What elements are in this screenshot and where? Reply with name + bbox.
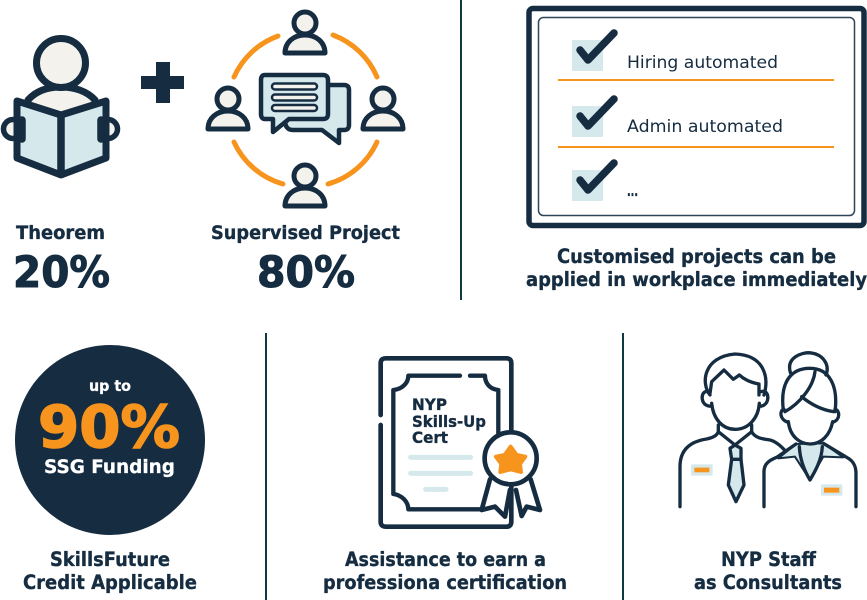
icon: group discussion [208,12,403,206]
woman [764,353,856,507]
checklist item: admin: Admin automated [627,117,783,137]
icon: plus [141,62,184,103]
panel: funding [15,345,205,594]
icon: certificate: Skills-Up [412,412,486,431]
icon: certificate: Cert [412,428,448,447]
panel: consultants [680,353,856,594]
panel: supervised project [208,12,403,298]
caption: certification [323,548,567,594]
checklist item: more: ... [627,184,638,200]
checklist item: admin [572,99,783,137]
panel: certification [323,358,567,594]
value: 80%: 80% [257,248,355,298]
icon: person reading book [4,38,118,175]
checklist item: hiring [572,33,778,73]
caption: customised projects [526,245,867,291]
caption: skillsfuture: SkillsFuture [50,548,170,571]
caption: skillsfuture [23,548,197,594]
caption: consultants [694,548,842,594]
checklist board [529,8,864,226]
label: theorem: Theorem [16,222,105,244]
value: 20%: 20% [13,248,110,298]
panel: customised projects [526,8,867,291]
badge: 90% SSG funding: 90% [38,393,180,461]
caption: skillsfuture: Credit Applicable [23,571,197,594]
caption: certification: Assistance to earn a [345,548,546,571]
icon: staff pair [680,353,856,507]
icon: certificate: NYP [412,395,447,414]
checklist item: hiring: Hiring automated [627,53,778,73]
caption: certification: professiona certification [323,571,567,594]
icon: certificate [381,358,540,527]
checklist item: more [572,163,638,201]
label: supervised project: Supervised Project [211,222,400,244]
badge: 90% SSG funding: up to [89,377,131,395]
man [680,354,786,507]
caption: customised projects: Customised projects can be [557,245,836,268]
panel: theorem [4,38,118,298]
caption: consultants: as Consultants [694,571,842,594]
badge: 90% SSG funding [15,345,205,535]
badge: 90% SSG funding: SSG Funding [44,456,175,478]
caption: consultants: NYP Staff [721,548,816,571]
orange ring segments [234,35,377,184]
